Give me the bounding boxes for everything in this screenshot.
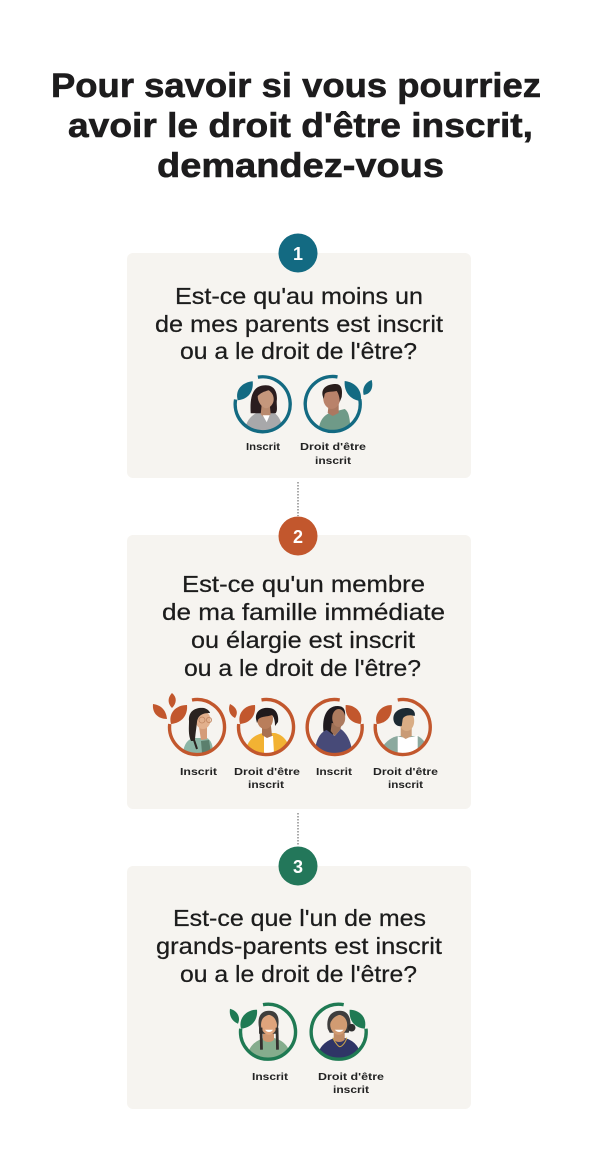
- question 2 text: [162, 571, 445, 681]
- question 3 text: ou a le droit de l'être?: [180, 961, 417, 987]
- panel: question 3: [127, 846, 471, 1109]
- panel: question 1: [127, 234, 471, 478]
- label: Droit d'être inscrit: Droit d'être: [300, 441, 366, 453]
- label: Droit d'être inscrit: inscrit: [388, 779, 424, 791]
- badge 3: [278, 846, 318, 886]
- title: demandez-vous: [157, 147, 444, 185]
- label: Inscrit: Inscrit: [246, 441, 281, 453]
- icon: relative in navy top, registered: [307, 700, 362, 755]
- question 3 text: grands-parents est inscrit: [156, 933, 443, 959]
- question 1 text: ou a le droit de l'être?: [180, 338, 417, 364]
- label: Droit d'être inscrit: Droit d'être: [318, 1071, 384, 1083]
- badge 2: 2: [293, 527, 303, 547]
- question 3 text: Est-ce que l'un de mes: [173, 905, 426, 931]
- icon: grandparent with necklace, entitled: [311, 1004, 366, 1060]
- title: [51, 67, 541, 185]
- icon: relative in grey-green jacket, entitled: [375, 700, 430, 755]
- panel: question 2: [127, 516, 471, 809]
- label: Droit d'être inscrit: Droit d'être: [373, 766, 438, 778]
- question 1 text: [155, 283, 444, 364]
- title: Pour savoir si vous pourriez: [51, 67, 541, 105]
- badge 2: [278, 516, 318, 556]
- icon: grandparent with braids, registered: [230, 1004, 296, 1060]
- badge 1: [278, 234, 318, 272]
- label: Droit d'être inscrit: [300, 441, 366, 467]
- icon: relative in yellow jacket, entitled: [229, 700, 294, 755]
- label: Droit d'être inscrit: [234, 766, 300, 791]
- connector: step 2 to 3: [297, 813, 299, 846]
- label: Droit d'être inscrit: inscrit: [333, 1084, 370, 1096]
- icon: parent, registered: [235, 377, 290, 434]
- question 1 text: Est-ce qu'au moins un: [175, 283, 423, 309]
- question 1 text: de mes parents est inscrit: [155, 311, 444, 337]
- badge 3: 3: [293, 857, 303, 877]
- label: Inscrit: Inscrit: [180, 766, 218, 778]
- label: Droit d'être inscrit: Droit d'être: [234, 766, 300, 778]
- question 3 text: [156, 905, 443, 987]
- label: Inscrit: Inscrit: [252, 1071, 289, 1083]
- question 2 text: de ma famille immédiate: [162, 599, 445, 625]
- connector: step 1 to 2: [297, 482, 299, 516]
- label: Droit d'être inscrit: [373, 766, 438, 791]
- badge 1: 1: [293, 244, 303, 264]
- label: Droit d'être inscrit: [318, 1071, 384, 1096]
- label: Droit d'être inscrit: inscrit: [315, 455, 352, 467]
- question 2 text: ou a le droit de l'être?: [184, 655, 421, 681]
- label: Inscrit: Inscrit: [316, 766, 353, 778]
- label: Droit d'être inscrit: inscrit: [248, 779, 285, 791]
- question 2 text: ou élargie est inscrit: [191, 627, 416, 653]
- question 2 text: Est-ce qu'un membre: [182, 571, 425, 597]
- icon: relative with glasses, registered: [153, 693, 225, 755]
- title: avoir le droit d'être inscrit,: [68, 107, 533, 145]
- icon: parent, entitled: [305, 376, 372, 432]
